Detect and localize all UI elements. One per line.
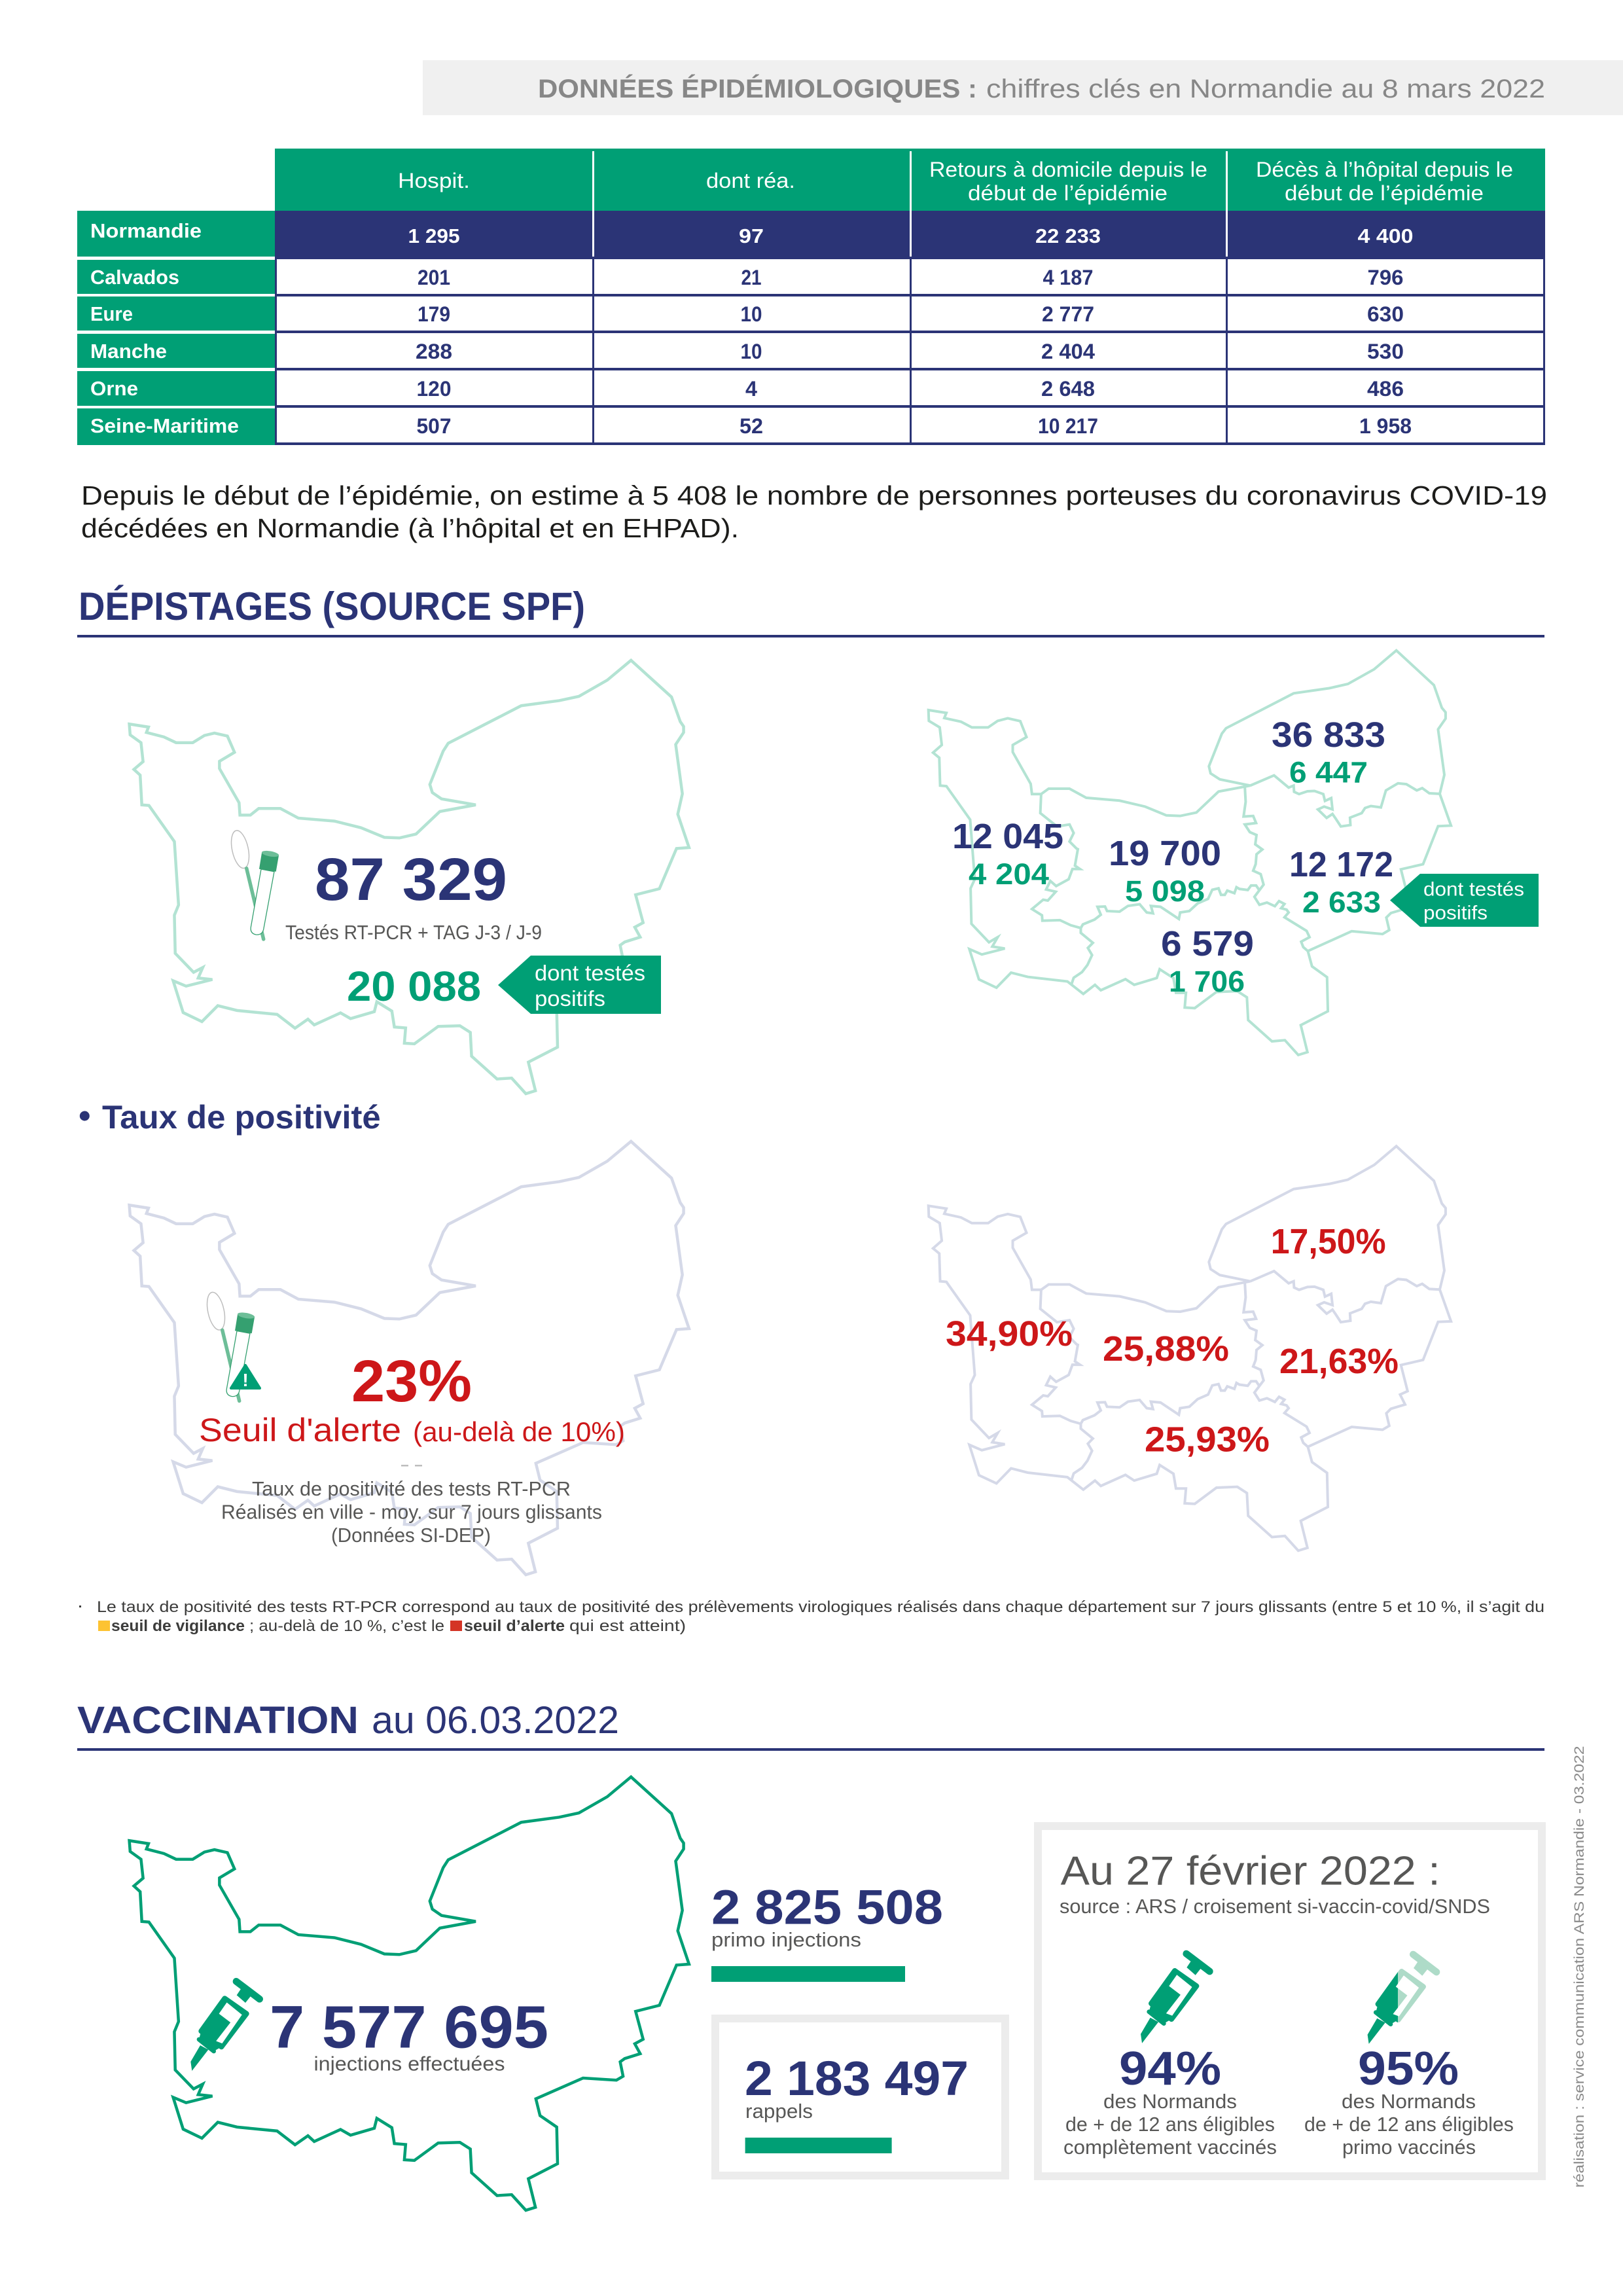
stat: total injections: 7 577 695 [270,1994,548,2061]
label: Orne screened [1161,924,1254,998]
table: hospital data by department: début de l’épidémie [968,181,1168,205]
footnote: positivity thresholds: Le taux de positivité des tests RT-PCR correspond au taux de positivité des prélèvements virologiques réalisés dans chaque département sur 7 jours glissants (entre 5 et 10 %, il s’agit du [97,1598,1544,1616]
callout: dont testés positifs: positifs [535,986,605,1011]
label: Eure screened [1289,845,1393,919]
labels: department positivity rates: 17,50% [1271,1222,1386,1261]
stat: primo injections: primo injections [711,1928,861,1951]
icon: test tube with warning [204,1291,260,1401]
heading: vaccination [77,1699,1544,1751]
stat: regional positivity rate: 23% [351,1349,472,1414]
callout: dont testés positifs [498,956,661,1014]
footnote: positivity thresholds: ; au-delà de 10 %, c’est le [249,1617,444,1635]
stat: 95% primo vaccinated: des Normands [1342,2090,1476,2113]
text: positivity description: Réalisés en ville - moy. sur 7 jours glissants [221,1500,602,1524]
label: Calvados screened: 19 700 [1109,834,1221,873]
table: hospital data by department: 288 [416,340,452,363]
header banner: DONNÉES ÉPIDÉMIOLOGIQUES : [538,74,977,103]
labels: department positivity rates: 25,93% [1145,1420,1270,1460]
table: hospital data by department: 201 [418,266,450,289]
text: positivity description: Taux de positivité des tests RT-PCR [252,1477,571,1500]
icon: test tube with warning: ! [242,1370,249,1390]
table: hospital data by department: 1 958 [1359,414,1412,438]
footnote: positivity thresholds [79,1598,1544,1635]
callout: dont testés positifs (departments) [1390,874,1539,927]
table: hospital data by department: 486 [1367,377,1404,401]
table: hospital data by department: 120 [416,377,452,401]
table: hospital data by department: 4 [745,377,757,401]
label: Calvados screened [1109,834,1221,908]
label: Orne screened: 6 579 [1161,924,1254,963]
panel: rappels [715,2018,1005,2176]
paragraph: estimated deaths [81,480,1547,543]
table: hospital data by department: 97 [739,224,764,247]
stat: 94% fully vaccinated: complètement vaccinés [1063,2136,1277,2159]
stat: people tested total: 87 329 [315,846,507,913]
table: hospital data by department: 10 [741,302,762,326]
table: hospital data by department: 4 187 [1043,266,1093,289]
paragraph: estimated deaths: décédées en Normandie (à l’hôpital et en EHPAD). [81,513,739,543]
stat: 94% fully vaccinated: 94% [1119,2043,1221,2095]
label: Eure screened: 12 172 [1289,845,1393,884]
label: Seine-Maritime screened: 6 447 [1289,755,1368,789]
table: hospital data by department: Calvados [90,266,179,289]
table: hospital data by department: 2 404 [1041,340,1095,363]
label: Orne screened: 1 706 [1169,965,1245,998]
stat: 95% primo vaccinated: 95% [1358,2043,1459,2095]
map: Normandie screened total [130,660,689,1094]
stat: 95% primo vaccinated: primo vaccinés [1342,2136,1476,2159]
table: hospital data by department: 2 648 [1041,377,1095,401]
table: hospital data by department: Retours à domicile depuis le [929,158,1207,181]
callout: dont testés positifs (departments): positifs [1423,902,1488,924]
stat: 94% fully vaccinated: de + de 12 ans éligibles [1065,2113,1275,2136]
map: Normandie vaccination [130,1777,689,2210]
footnote: positivity thresholds: seuil d’alerte [464,1617,565,1635]
table: hospital data by department: 2 777 [1042,302,1094,326]
paragraph: estimated deaths: Depuis le début de l’épidémie, on estime à 5 408 le nombre de personnes porteuses du coronavirus COVID-19 [81,480,1547,511]
labels: department positivity rates: 21,63% [1279,1342,1399,1381]
label: alert threshold: (au-delà de 10%) [413,1416,625,1447]
stat: 95% primo vaccinated: de + de 12 ans éligibles [1304,2113,1514,2136]
table: hospital data by department: 1 295 [408,224,459,247]
labels: department positivity rates [946,1222,1399,1460]
table: hospital data by department: Manche [90,340,167,363]
credit: vertical production note: réalisation : service communication ARS Normandie - 03.2022 [1572,1746,1587,2187]
header banner: chiffres clés en Normandie au 8 mars 2022 [986,75,1545,103]
heading: vaccination: VACCINATION [77,1699,359,1742]
map: Normandie positivity [130,1141,689,1575]
stat: people tested total: Testés RT-PCR + TAG J-3 / J-9 [285,921,542,944]
label: Eure screened: 2 633 [1302,886,1381,919]
table: hospital data by department: 507 [416,414,452,438]
stat: total injections: injections effectuées [314,2053,505,2075]
table: hospital data by department: Décès à l’hôpital depuis le [1256,158,1513,181]
source line: source : ARS / croisement si-vaccin-covid/SNDS [1060,1895,1490,1918]
labels: department positivity rates: 25,88% [1103,1329,1229,1369]
panel: rappels: 2 183 497 [745,2051,969,2106]
table: hospital data by department: début de l’épidémie [1285,181,1484,205]
stat: people tested total [285,846,542,944]
sub-heading: taux de positivité: Taux de positivité [102,1099,381,1136]
icon: syringe [190,1981,260,2071]
table: hospital data by department: 10 [741,340,762,363]
label: Seine-Maritime screened: 36 833 [1272,715,1385,755]
table: hospital data by department: Normandie [90,219,202,242]
table: hospital data by department [77,149,1545,445]
label: Manche screened: 12 045 [952,817,1063,856]
table: hospital data by department: dont réa. [706,169,795,192]
header banner [423,60,1623,115]
label: Seine-Maritime screened [1272,715,1385,789]
table: hospital data by department: 630 [1367,302,1404,326]
table: hospital data by department: 21 [741,266,762,289]
label: Manche screened [952,817,1063,891]
label: alert threshold: Seuil d'alerte [199,1412,401,1448]
table: hospital data by department: 179 [418,302,450,326]
panel: rappels: rappels [745,2100,813,2123]
icon: full syringe [1141,1954,1209,2043]
table: hospital data by department: Eure [90,302,133,325]
label: Manche screened: 4 204 [969,857,1049,891]
stat: primo injections: 2 825 508 [711,1880,943,1934]
table: hospital data by department: 10 217 [1038,414,1098,438]
callout: dont testés positifs: dont testés [535,961,645,985]
map: departments positivity [929,1146,1451,1551]
text: positivity description [221,1465,602,1547]
icon: half syringe [1368,1954,1436,2044]
panel title: Au 27 février 2022 : [1061,1849,1440,1894]
labels: department positivity rates: 34,90% [946,1314,1073,1354]
table: hospital data by department: 530 [1367,340,1404,363]
table: hospital data by department: Orne [90,377,138,400]
table: hospital data by department: Seine-Maritime [90,414,239,437]
table: hospital data by department: 4 400 [1357,224,1414,247]
icon: swab and test tube [228,829,279,939]
footnote: positivity thresholds: seuil de vigilance [111,1617,245,1635]
text: positivity description: (Données SI-DEP) [331,1524,491,1547]
stat: primo injections [711,1880,943,1982]
heading: dépistages: DÉPISTAGES (SOURCE SPF) [79,584,585,628]
label: alert threshold [199,1412,625,1448]
table: hospital data by department: 22 233 [1035,224,1101,247]
table: hospital data by department: 52 [740,414,763,438]
heading: vaccination: au 06.03.2022 [372,1699,619,1742]
heading: dépistages [77,584,1544,637]
table: hospital data by department: 796 [1368,266,1403,289]
stat: 94% fully vaccinated [1063,2043,1277,2159]
callout: dont testés positifs (departments): dont testés [1423,878,1524,901]
stat: 94% fully vaccinated: des Normands [1103,2090,1237,2113]
stat: 95% primo vaccinated [1304,2043,1514,2159]
map: departments screened [929,651,1451,1055]
stat: positive tests: 20 088 [347,963,481,1010]
panel: au 27 février 2022 [1038,1826,1542,2176]
table: hospital data by department: Hospit. [398,169,470,192]
label: Calvados screened: 5 098 [1125,874,1205,908]
footnote: positivity thresholds: qui est atteint) [569,1617,686,1635]
